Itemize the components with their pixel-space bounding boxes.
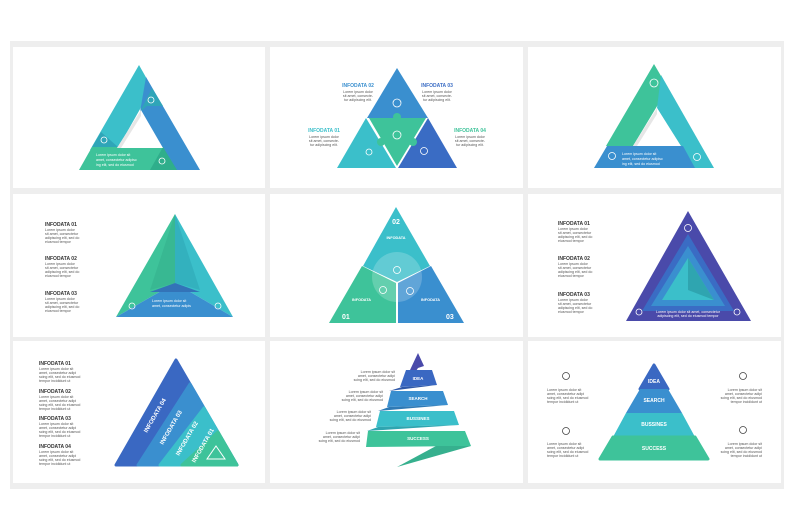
panel: row2 col3 purple layered triangle: sit amet, consectetur [558,231,592,235]
panel: row3 col1 stacked triangles: Lorem ipsum dolor sit [39,367,73,371]
panel: row2 col3 purple layered triangle: eiusmod tempor [558,274,585,278]
panel: row2 col3 purple layered triangle: adipiscing elit, sed do eiusmod tempor [657,314,719,318]
panel: row3 col2 zigzag pyramid: BUSSINES [406,416,430,421]
panel: row3 col3 pyramid with icons: SUCCESS [642,446,667,452]
panel: row1 col2 puzzle triangle: tur adipiscing elit. [456,143,484,147]
panel: row2 col1 3D pyramid: INFODATA 01 [45,222,77,228]
panel: row3 col2 zigzag pyramid: IDEA [413,376,424,381]
panel: row1 col1 hollow triangle: ing elit, sed do eiusmod [96,163,134,167]
panel: row1 col3 hollow triangle: Lorem ipsum dolor sit [622,152,656,156]
panel: row1 col1 hollow triangle: Lorem ipsum dolor sit [96,153,130,157]
panel: row2 col2 three-part triangle: 03 [446,314,454,321]
panel: row3 col3 pyramid with icons: amet, consectetur adipi [547,392,584,396]
panel: row3 col3 pyramid with icons: tempor incididunt ut [547,454,578,458]
panel: row3 col3 pyramid with icons: Lorem ipsum dolor sit [547,388,581,392]
panel: row2 col1 3D pyramid: adipiscing elit, sed do [45,270,79,274]
panel: row3 col2 zigzag pyramid: amet, consectetur adipi [346,394,383,398]
panel: row3 col3 pyramid with icons: scing elit, sed do eiusmod [547,396,588,400]
panel: row2 col1 3D pyramid: Lorem ipsum dolor [45,262,76,266]
panel: row2 col2 three-part triangle: INFODATA [421,298,440,302]
panel: row1 col2 puzzle triangle: sit amet, consecte- [455,139,486,143]
panel: row1 col2 puzzle triangle [270,47,523,188]
panel: row3 col3 pyramid with icons: scing elit, sed do eiusmod [721,396,762,400]
panel: row3 col2 zigzag pyramid: amet, consectetur adipi [358,374,395,378]
panel: row2 col3 purple layered triangle: eiusmod tempor [558,239,585,243]
panel: row3 col2 zigzag pyramid: scing elit, sed do eiusmod [354,378,395,382]
panel: row3 col1 stacked triangles: tempor incididunt ut [39,379,70,383]
panel: row1 col2 puzzle triangle: Lorem ipsum dolor [422,90,453,94]
panel: row3 col3 pyramid with icons: SEARCH [643,398,665,404]
panel: row2 col3 purple layered triangle: adipiscing elit, sed do [558,235,592,239]
panel: row3 col2 zigzag pyramid: amet, consectetur adipi [334,414,371,418]
panel: row2 col2 three-part triangle: 02 [392,219,400,226]
panel: row2 col3 purple layered triangle [528,194,781,337]
panel: row3 col3 pyramid with icons: amet, consectetur adipi [725,446,762,450]
panel: row3 col1 stacked triangles: INFODATA 04 [39,444,71,450]
panel: row2 col3 purple layered triangle: Lorem ipsum dolor [558,298,589,302]
panel: row1 col2 puzzle triangle: INFODATA 04 [454,128,486,134]
panel: row3 col1 stacked triangles: amet, consectetur adipi [39,426,76,430]
panel: row3 col1 stacked triangles [13,341,265,483]
panel: row3 col3 pyramid with icons: Lorem ipsum dolor sit [728,388,762,392]
panel: row3 col1 stacked triangles: tempor incididunt ut [39,462,70,466]
panel: row3 col1 stacked triangles: INFODATA 04 [144,397,168,434]
panel: row3 col1 stacked triangles: scing elit, sed do eiusmod [39,458,80,462]
panel: row2 col1 3D pyramid: adipiscing elit, sed do [45,305,79,309]
panel: row3 col3 pyramid with icons: scing elit, sed do eiusmod [547,450,588,454]
panel: row3 col1 stacked triangles: Lorem ipsum dolor sit [39,450,73,454]
panel: row3 col2 zigzag pyramid: scing elit, sed do eiusmod [319,439,360,443]
panel: row2 col1 3D pyramid: eiusmod tempor [45,309,72,313]
panel: row2 col1 3D pyramid: sit amet, consectetur [45,232,79,236]
panel: row3 col3 pyramid with icons: Lorem ipsum dolor sit [728,442,762,446]
panel: row3 col3 pyramid with icons: tempor incididunt ut [547,400,578,404]
panel: row2 col2 three-part triangle: 01 [342,314,350,321]
panel: row2 col2 three-part triangle: INFODATA [352,298,371,302]
panel: row3 col1 stacked triangles: INFODATA 01 [192,427,216,464]
hole [633,108,681,146]
panel: row3 col1 stacked triangles: INFODATA 01 [39,361,71,367]
panel: row1 col2 puzzle triangle: INFODATA 03 [421,83,453,89]
panel: row1 col2 puzzle triangle: INFODATA 02 [342,83,374,89]
panel: row3 col1 stacked triangles: amet, consectetur adipi [39,399,76,403]
panel: row2 col1 3D pyramid: Lorem ipsum dolor sit [152,299,186,303]
panel: row1 col2 puzzle triangle: Lorem ipsum dolor [455,135,486,139]
panel: row3 col2 zigzag pyramid: scing elit, sed do eiusmod [330,418,371,422]
panel: row3 col1 stacked triangles: tempor incididunt ut [39,407,70,411]
panel: row3 col1 stacked triangles: INFODATA 03 [160,409,184,446]
panel: row3 col2 zigzag pyramid: SUCCESS [407,436,429,441]
panel: row3 col3 pyramid with icons [528,341,781,483]
panel: row3 col1 stacked triangles: INFODATA 03 [39,416,71,422]
panel: row2 col3 purple layered triangle: Lorem ipsum dolor sit amet, consectetur [656,310,721,314]
panel: row3 col1 stacked triangles: INFODATA 02 [176,420,200,457]
panel: row3 col2 zigzag pyramid: Lorem ipsum dolor sit [326,431,360,435]
panel: row3 col2 zigzag pyramid: Lorem ipsum dolor sit [337,410,371,414]
panel: row2 col1 3D pyramid: Lorem ipsum dolor [45,228,76,232]
panel: row1 col2 puzzle triangle: sit amet, consecte- [343,94,374,98]
panel: row3 col2 zigzag pyramid: Lorem ipsum dolor sit [349,390,383,394]
panel: row1 col2 puzzle triangle: tur adipiscing elit. [423,98,451,102]
panel: row3 col1 stacked triangles: amet, consectetur adipi [39,371,76,375]
panel: row3 col3 pyramid with icons: IDEA [648,379,660,385]
panel: row2 col1 3D pyramid: INFODATA 03 [45,291,77,297]
panel: row1 col2 puzzle triangle: INFODATA 01 [308,128,340,134]
panel: row3 col1 stacked triangles: scing elit, sed do eiusmod [39,375,80,379]
panel: row3 col1 stacked triangles: Lorem ipsum dolor sit [39,422,73,426]
panel: row2 col1 3D pyramid: eiusmod tempor [45,274,72,278]
panel: row2 col3 purple layered triangle: Lorem ipsum dolor [558,262,589,266]
panel: row2 col3 purple layered triangle: Lorem ipsum dolor [558,227,589,231]
panel: row3 col1 stacked triangles: scing elit, sed do eiusmod [39,430,80,434]
panel: row2 col1 3D pyramid: Lorem ipsum dolor [45,297,76,301]
panel: row2 col2 three-part triangle: INFODATA [386,236,406,240]
panel: row3 col1 stacked triangles: scing elit, sed do eiusmod [39,403,80,407]
panel: row1 col2 puzzle triangle: Lorem ipsum dolor [343,90,374,94]
panel: row3 col2 zigzag pyramid: scing elit, sed do eiusmod [342,398,383,402]
panel: row1 col3 hollow triangle: ing elit, sed do eiusmod [622,162,660,166]
panel: row2 col3 purple layered triangle: adipiscing elit, sed do [558,306,592,310]
panel: row2 col1 3D pyramid: sit amet, consectetur [45,301,79,305]
panel: row1 col2 puzzle triangle: tur adipiscing elit. [310,143,338,147]
panel: row1 col2 puzzle triangle: sit amet, consecte- [309,139,340,143]
panel: row2 col3 purple layered triangle: sit amet, consectetur [558,266,592,270]
panel: row2 col2 three-part triangle [270,194,523,337]
panel: row2 col3 purple layered triangle: adipiscing elit, sed do [558,270,592,274]
panel: row2 col3 purple layered triangle: sit amet, consectetur [558,302,592,306]
panel: row2 col1 3D pyramid: sit amet, consectetur [45,266,79,270]
panel: row3 col3 pyramid with icons: BUSSINES [641,422,667,428]
panel: row1 col2 puzzle triangle: sit amet, consecte- [422,94,453,98]
panel: row2 col3 purple layered triangle: INFODATA 01 [558,221,590,227]
panel: row3 col3 pyramid with icons: amet, consectetur adipi [725,392,762,396]
panel: row3 col2 zigzag pyramid [270,341,523,483]
panel: row2 col3 purple layered triangle: INFODATA 03 [558,292,590,298]
panel: row3 col1 stacked triangles: amet, consectetur adipi [39,454,76,458]
panel: row2 col1 3D pyramid [13,194,265,337]
panel: row2 col3 purple layered triangle: eiusmod tempor [558,310,585,314]
panel: row3 col2 zigzag pyramid: amet, consectetur adipi [323,435,360,439]
panel: row2 col1 3D pyramid: adipiscing elit, sed do [45,236,79,240]
panel: row3 col3 pyramid with icons: tempor incididunt ut [731,400,762,404]
panel: row3 col2 zigzag pyramid: Lorem ipsum dolor sit [361,370,395,374]
panel: row3 col3 pyramid with icons: amet, consectetur adipi [547,446,584,450]
panel: row3 col2 zigzag pyramid: SEARCH [408,396,428,401]
panel: row2 col1 3D pyramid: eiusmod tempor [45,240,72,244]
panel: row3 col1 stacked triangles: Lorem ipsum dolor sit [39,395,73,399]
panel: row2 col3 purple layered triangle: INFODATA 02 [558,256,590,262]
panel: row1 col3 hollow triangle [528,47,781,188]
panel: row1 col1 hollow triangle [13,47,265,188]
panel: row1 col2 puzzle triangle: Lorem ipsum dolor [309,135,340,139]
panel: row1 col1 hollow triangle: amet, consectetur adipisc [96,158,137,162]
panel: row2 col1 3D pyramid: INFODATA 02 [45,256,77,262]
panel: row1 col2 puzzle triangle: tur adipiscing elit. [344,98,372,102]
panel: row2 col1 3D pyramid: amet, consectetur adipis [152,304,191,308]
panel: row3 col3 pyramid with icons: tempor incididunt ut [731,454,762,458]
hole [117,110,163,148]
panel: row3 col3 pyramid with icons: Lorem ipsum dolor sit [547,442,581,446]
panel: row3 col1 stacked triangles: tempor incididunt ut [39,434,70,438]
panel: row3 col1 stacked triangles: INFODATA 02 [39,389,71,395]
panel: row1 col3 hollow triangle: amet, consectetur adipisc [622,157,663,161]
panel: row3 col3 pyramid with icons: scing elit, sed do eiusmod [721,450,762,454]
